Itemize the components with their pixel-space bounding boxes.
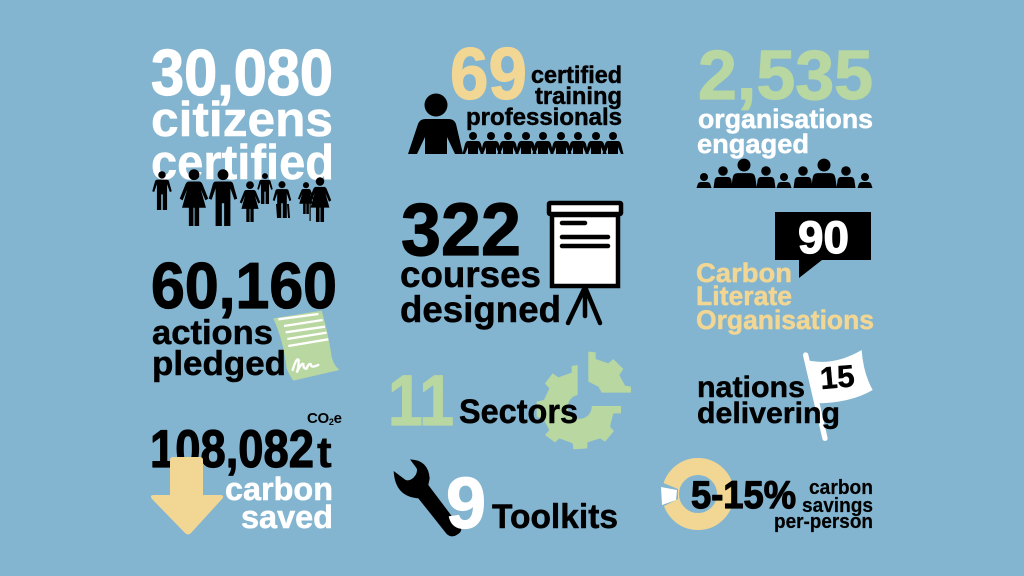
number: 2,535: 2,535 [698, 36, 873, 114]
number: 30,080: 30,080 [151, 36, 333, 109]
label: Toolkits: Toolkits [492, 498, 618, 536]
panel: organisations engaged [696, 36, 873, 188]
panel: toolkits [394, 459, 618, 544]
icon: gear in two segments [537, 352, 631, 449]
icon: wrench [394, 459, 461, 536]
icon: flip chart [549, 203, 621, 323]
label: certified: certified [151, 136, 334, 190]
number: 60,160: 60,160 [151, 249, 337, 322]
label: savings: savings [802, 495, 873, 517]
label: Carbon: Carbon [696, 258, 792, 288]
label: per-person: per-person [774, 511, 873, 533]
number: 108,082: 108,082 [150, 420, 314, 479]
label: engaged: engaged [697, 129, 809, 159]
panel: courses designed [400, 188, 621, 330]
label: professionals: professionals [466, 104, 622, 131]
panel: nations delivering [697, 350, 873, 438]
panel: carbon literate organisations [696, 212, 874, 335]
icon: speech bubble [775, 212, 871, 278]
panel: carbon saved [150, 410, 342, 535]
label: nations: nations [697, 371, 805, 404]
icon: signed document [273, 311, 339, 381]
number: 5-15%: 5-15% [691, 474, 796, 517]
number: 15: 15 [819, 358, 856, 396]
label: actions: actions [152, 314, 273, 352]
icon: down arrow [151, 457, 223, 534]
icon: ring with gap [656, 466, 726, 522]
label: organisations: organisations [698, 104, 873, 134]
label: certified: certified [531, 62, 622, 89]
icon: white flag [806, 350, 873, 438]
number: 322: 322 [401, 188, 521, 271]
panel: certified training professionals [408, 34, 624, 154]
panel: carbon savings per person [656, 466, 873, 533]
panel: actions pledged [151, 249, 339, 383]
label: carbon: carbon [225, 471, 333, 507]
label: carbon: carbon [809, 477, 873, 499]
label: training: training [535, 83, 622, 110]
label: saved: saved [241, 499, 333, 535]
icon: trainer and trainees [408, 94, 624, 154]
icon: row of people [696, 159, 872, 188]
label: courses: courses [400, 254, 541, 295]
label: pledged: pledged [152, 345, 286, 383]
label: Organisations: Organisations [696, 305, 874, 335]
number: 11: 11 [388, 362, 454, 441]
label: Sectors: Sectors [459, 393, 578, 431]
label: Literate: Literate [696, 281, 792, 311]
label: designed: designed [400, 289, 561, 330]
unit: CO2e: CO [307, 410, 329, 427]
unit: CO2e: 2 [329, 417, 334, 427]
panel: sectors [388, 352, 631, 449]
icon: group of people [152, 169, 331, 226]
number: 90: 90 [798, 212, 849, 263]
unit: CO2e: e [334, 410, 342, 427]
unit: t: t [317, 428, 332, 477]
number: 9: 9 [446, 464, 486, 544]
label: citizens: citizens [151, 93, 333, 147]
panel: citizens certified [151, 36, 334, 226]
number: 69: 69 [450, 34, 527, 115]
label: delivering: delivering [697, 397, 840, 430]
